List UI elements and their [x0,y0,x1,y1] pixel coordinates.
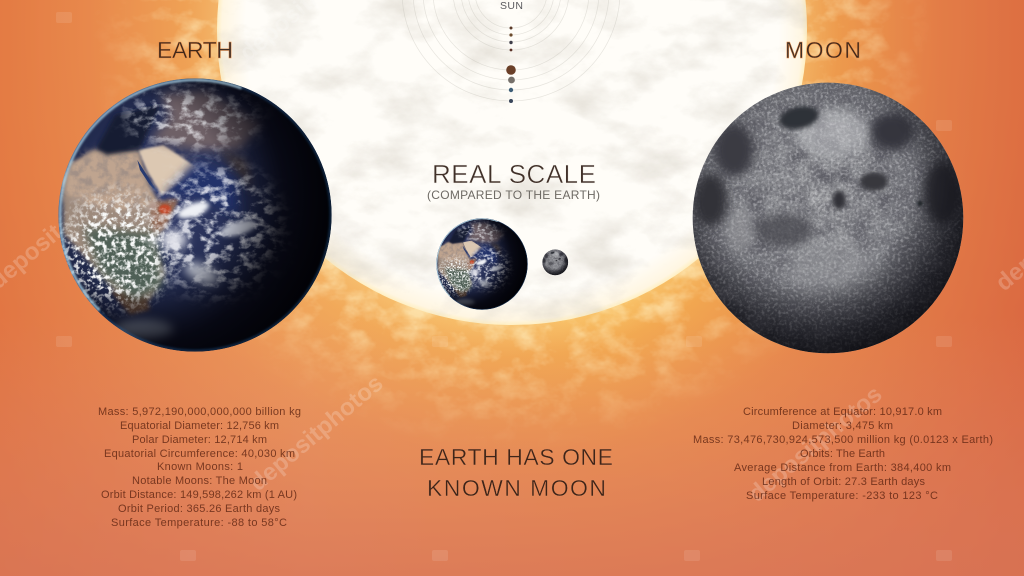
subheading: compared to the Earth: (COMPARED TO THE EARTH) [427,188,600,202]
small Moon [542,248,569,276]
sun disc [217,0,807,326]
Earth facts: Known Moons: 1 [157,461,243,473]
callout: Earth has one known Moon: KNOWN MOON [427,475,606,501]
Earth facts: Surface Temperature: -88 to 58°C [111,517,287,529]
watermarks: depositphotos [744,381,888,508]
Moon facts [693,406,993,502]
small Earth [434,216,531,313]
Earth facts: Polar Diameter: 12,714 km [132,434,267,446]
Moon facts: Surface Temperature: -233 to 123 °C [746,490,938,502]
callout: Earth has one known Moon [419,444,613,501]
label: Sun: SUN [500,0,523,12]
Earth facts: Equatorial Diameter: 12,756 km [120,420,279,432]
Moon facts: Average Distance from Earth: 384,400 km [734,462,951,474]
Earth facts: Orbit Distance: 149,598,262 km (1 AU) [101,489,297,501]
solar system diagram [402,0,620,103]
watermarks: de [492,256,530,295]
watermarks: depositphotos [245,370,389,497]
planet: Moon [684,70,974,360]
Moon facts: Circumference at Equator: 10,917.0 km [743,406,942,418]
Moon facts: Diameter: 3,475 km [792,420,893,432]
Moon facts: Length of Orbit: 27.3 Earth days [762,476,926,488]
Moon facts: Orbits: The Earth [800,448,885,460]
heading: Moon: MOON [785,37,861,63]
Earth facts: Equatorial Circumference: 40,030 km [104,448,295,460]
heading: Earth: EARTH [157,37,233,63]
Earth facts: Notable Moons: The Moon [132,475,267,487]
planet: Earth [50,70,340,360]
heading: Real Scale: REAL SCALE [432,159,596,189]
Earth facts: Orbit Period: 365.26 Earth days [118,503,280,515]
Earth facts: Mass: 5,972,190,000,000,000 billion kg [98,406,301,418]
Earth facts [98,406,301,529]
Moon facts: Mass: 73,476,730,924,573,500 million kg (0.0123 x Earth) [693,434,993,446]
callout: Earth has one known Moon: EARTH HAS ONE [419,444,613,470]
